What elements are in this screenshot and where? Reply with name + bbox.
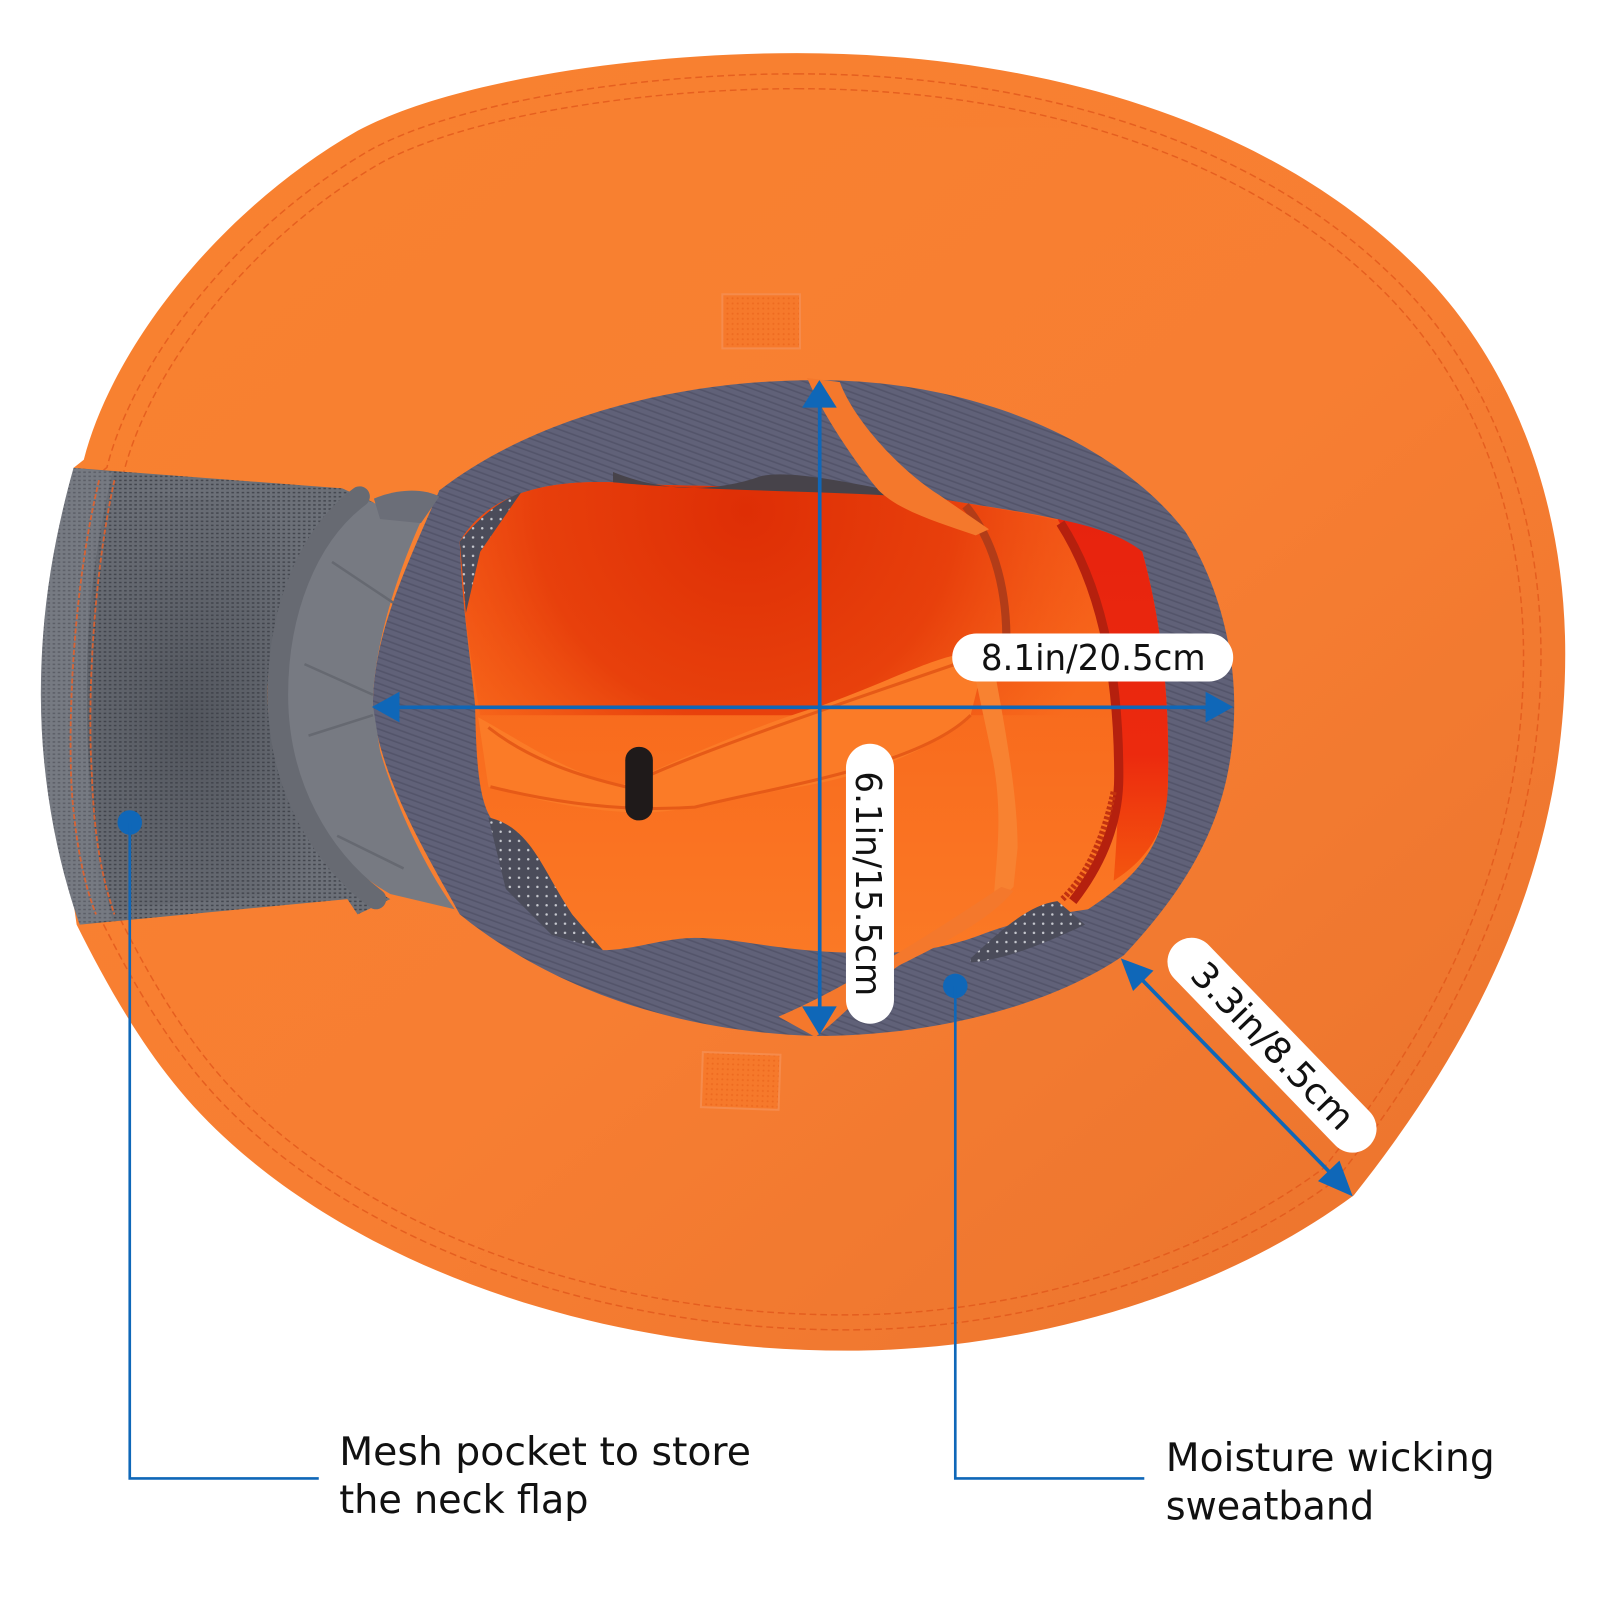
vertical inner strap — [976, 679, 1018, 907]
mesh light hem — [41, 468, 112, 925]
ruffled fabric — [281, 501, 455, 909]
pill label: brim: 3.3in/8.5cm — [1182, 954, 1362, 1139]
folded neck flap — [478, 656, 979, 812]
pocket trim — [278, 497, 376, 899]
shadow under top band — [613, 472, 950, 501]
band corner top — [374, 491, 439, 523]
dimension arrow: brim — [1121, 958, 1353, 1196]
callout: mesh pocket: Mesh pocket to store — [339, 1430, 751, 1475]
interior deep shadow — [460, 482, 1114, 715]
flap hem — [488, 659, 971, 808]
callout: sweatband — [943, 974, 1495, 1529]
dark seam inner — [966, 506, 1006, 639]
callout: sweatband: Moisture wicking — [1166, 1436, 1495, 1481]
dimension arrow: width — [372, 692, 1233, 722]
cord lock — [625, 747, 653, 820]
callout: mesh pocket: the neck flap — [339, 1478, 588, 1523]
seam fray — [1063, 792, 1114, 899]
dark seam — [1061, 523, 1119, 901]
upper strap — [807, 378, 989, 535]
mesh lining right — [971, 901, 1085, 962]
lower strap — [779, 887, 1014, 1037]
callout: mesh pocket — [117, 810, 751, 1523]
mesh pocket — [41, 468, 455, 925]
mesh lining top left — [460, 492, 521, 613]
velcro patch top — [722, 294, 800, 348]
hat brim — [51, 53, 1565, 1351]
sweatband ring — [373, 380, 1234, 1036]
hat interior — [460, 378, 1168, 1037]
mesh lining left — [488, 817, 603, 950]
red side panel — [1057, 519, 1168, 881]
mesh shading — [87, 488, 342, 909]
pill label: width: 8.1in/20.5cm — [981, 638, 1206, 679]
dimension arrow: height — [802, 380, 837, 1035]
callout: sweatband: sweatband — [1166, 1484, 1374, 1529]
brim stitching — [75, 74, 1541, 1330]
mesh orange stitching — [71, 480, 114, 914]
pill label: brim — [1158, 928, 1387, 1163]
ruffle folds — [304, 562, 404, 868]
velcro patch bottom — [701, 1052, 780, 1110]
pill label: height: 6.1in/15.5cm — [847, 771, 888, 996]
